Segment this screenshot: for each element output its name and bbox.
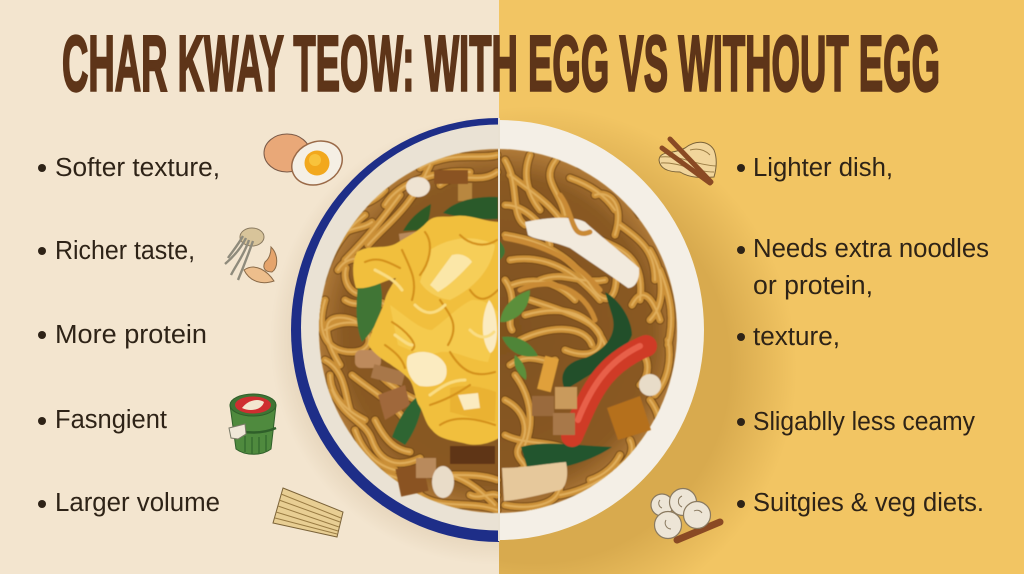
food: red pepper bbox=[572, 346, 646, 436]
item: needs extra noodles or protein: Needs extra noodles bbox=[753, 235, 989, 263]
icon: rice cake slices and cinnamon stick bbox=[651, 488, 720, 540]
item: softer texture: Softer texture, bbox=[55, 154, 220, 182]
panel: with egg list bbox=[38, 154, 220, 517]
food bbox=[319, 149, 677, 513]
bowl: left inner bbox=[301, 124, 498, 530]
icon: noodle bundle bbox=[273, 488, 343, 537]
item: larger volume: Larger volume bbox=[55, 489, 220, 517]
food: spinach right bbox=[521, 292, 632, 470]
item: texture: texture, bbox=[753, 323, 840, 351]
icon: noodle sheets and chopsticks bbox=[659, 139, 716, 183]
item: needs extra noodles or protein bbox=[737, 235, 989, 300]
icon: noodles and shell bbox=[225, 228, 277, 283]
item: lighter dish: Lighter dish, bbox=[753, 154, 893, 182]
bowl: left blue rim bbox=[291, 118, 499, 542]
food: basil leaves right bbox=[499, 240, 538, 380]
item: fragrant: Fasngient bbox=[55, 406, 167, 434]
food: tofu pieces left bbox=[355, 170, 495, 498]
food: sauce base bbox=[319, 149, 677, 513]
food: rice cake right bbox=[502, 462, 567, 501]
bowl bbox=[291, 118, 707, 542]
item: needs extra noodles or protein: or protein, bbox=[753, 272, 873, 300]
food: leaves left bbox=[357, 197, 498, 445]
background: right yellow half bbox=[499, 0, 1024, 574]
item: richer taste: Richer taste, bbox=[55, 237, 195, 265]
food: scrambled egg bbox=[353, 216, 499, 445]
food: white tofu right bbox=[525, 218, 639, 288]
panel: without egg list bbox=[737, 154, 989, 517]
item: suits veg diets: Suitgies & veg diets. bbox=[753, 489, 984, 517]
food: noodles bbox=[322, 152, 671, 510]
food: noodles over tofu bbox=[505, 195, 600, 320]
background: left cream half bbox=[0, 0, 499, 574]
item: more protein: More protein bbox=[55, 321, 207, 349]
item: slightly less creamy: Sligablly less ceamy bbox=[753, 408, 975, 436]
icon: green cup bbox=[229, 394, 276, 454]
bowl: center divider bbox=[498, 118, 500, 541]
food: tofu and pieces right bbox=[532, 356, 661, 440]
icon: eggs bbox=[264, 133, 349, 193]
bowl: right white rim bbox=[500, 120, 704, 540]
